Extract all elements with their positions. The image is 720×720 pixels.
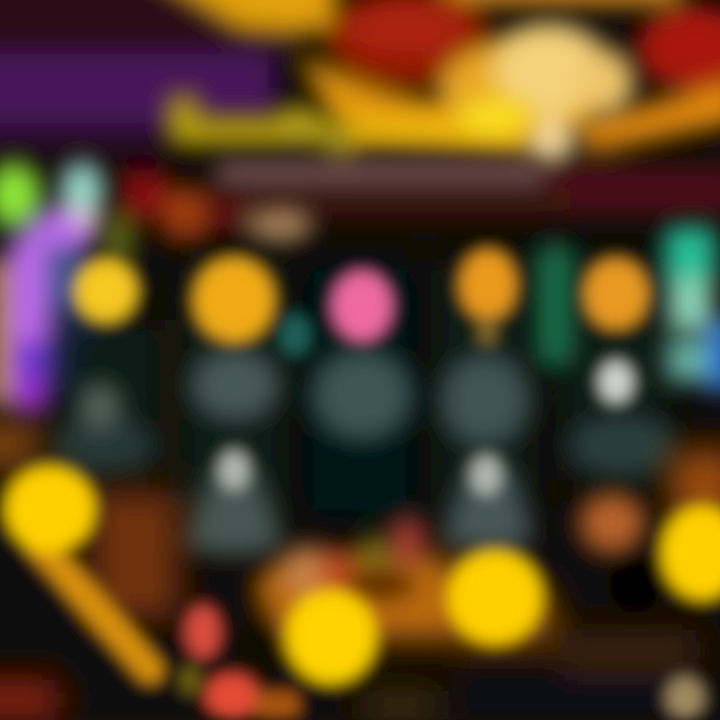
title <box>168 95 529 161</box>
left neon machine <box>0 162 102 412</box>
foreground red lights <box>178 559 705 720</box>
ceiling <box>0 0 720 218</box>
subtitle <box>215 160 545 188</box>
table with chips <box>255 493 644 630</box>
red panels above machines <box>102 170 312 268</box>
yellow chips <box>4 465 720 685</box>
slot machine bodies <box>60 260 670 520</box>
diagonal gold rail <box>40 545 150 670</box>
casino floor <box>0 420 720 720</box>
machine lights <box>74 249 649 357</box>
chandelier <box>492 24 633 162</box>
right neon panels <box>538 228 720 390</box>
seat highlights <box>218 360 634 496</box>
machine seats <box>54 349 674 555</box>
